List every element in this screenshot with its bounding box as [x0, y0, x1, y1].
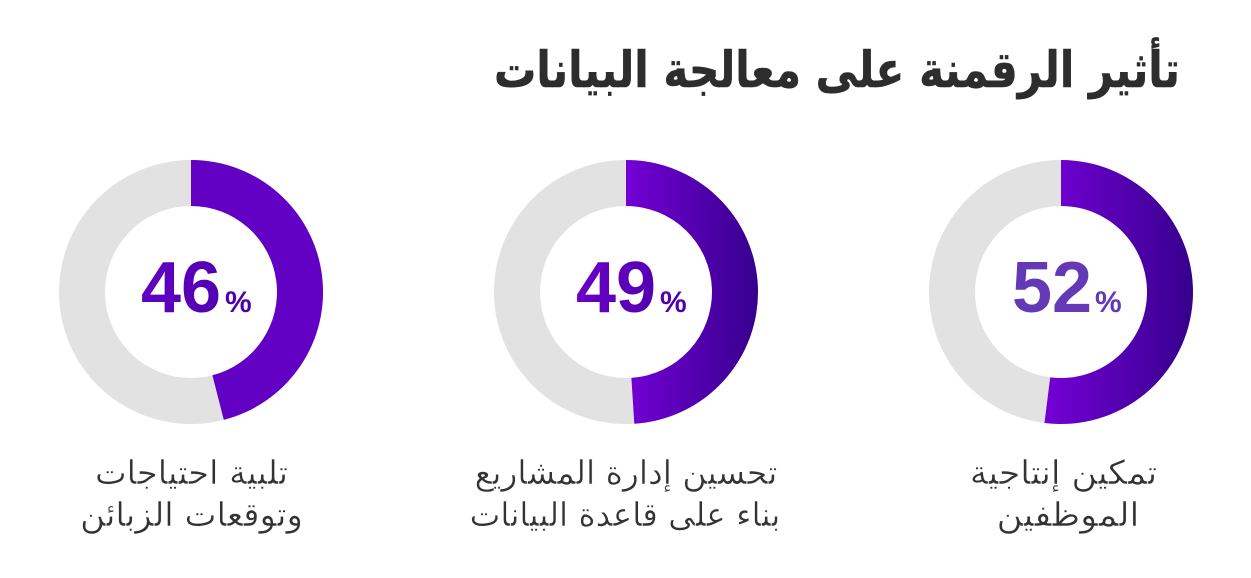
label: customer needs: وتوقعات الزبائن [80, 495, 303, 535]
title: تأثير الرقمنة على معالجة البيانات [494, 37, 1180, 99]
panel: customer needs 46% [80, 160, 323, 535]
label: customer needs [80, 453, 303, 535]
label: employee productivity: تمكين إنتاجية [970, 454, 1157, 493]
value: 49%: % [660, 286, 687, 319]
donut value arc: 46% [191, 160, 323, 420]
donut value arc: 49% [626, 160, 758, 424]
value: 46%: % [225, 286, 252, 319]
donut track: 46% [82, 183, 300, 401]
label: project management: بناء على قاعدة البيانات [470, 496, 780, 534]
value: 46%: 46 [141, 248, 221, 328]
value: 52%: % [1095, 286, 1122, 319]
panel: employee productivity 52% [952, 160, 1193, 535]
donut value arc: 52% [1044, 160, 1193, 424]
label: project management: تحسين إدارة المشاريع [475, 453, 777, 493]
label: project management [470, 453, 780, 534]
label: employee productivity [970, 454, 1157, 535]
label: employee productivity: الموظفين [997, 496, 1139, 535]
donut track: 52% [952, 183, 1170, 401]
donut track: 49% [517, 183, 735, 401]
value: 52%: 52 [1012, 248, 1092, 328]
label: customer needs: تلبية احتياجات [95, 453, 288, 492]
value: 49%: 49 [576, 248, 656, 328]
panel: project management 49% [470, 160, 780, 534]
